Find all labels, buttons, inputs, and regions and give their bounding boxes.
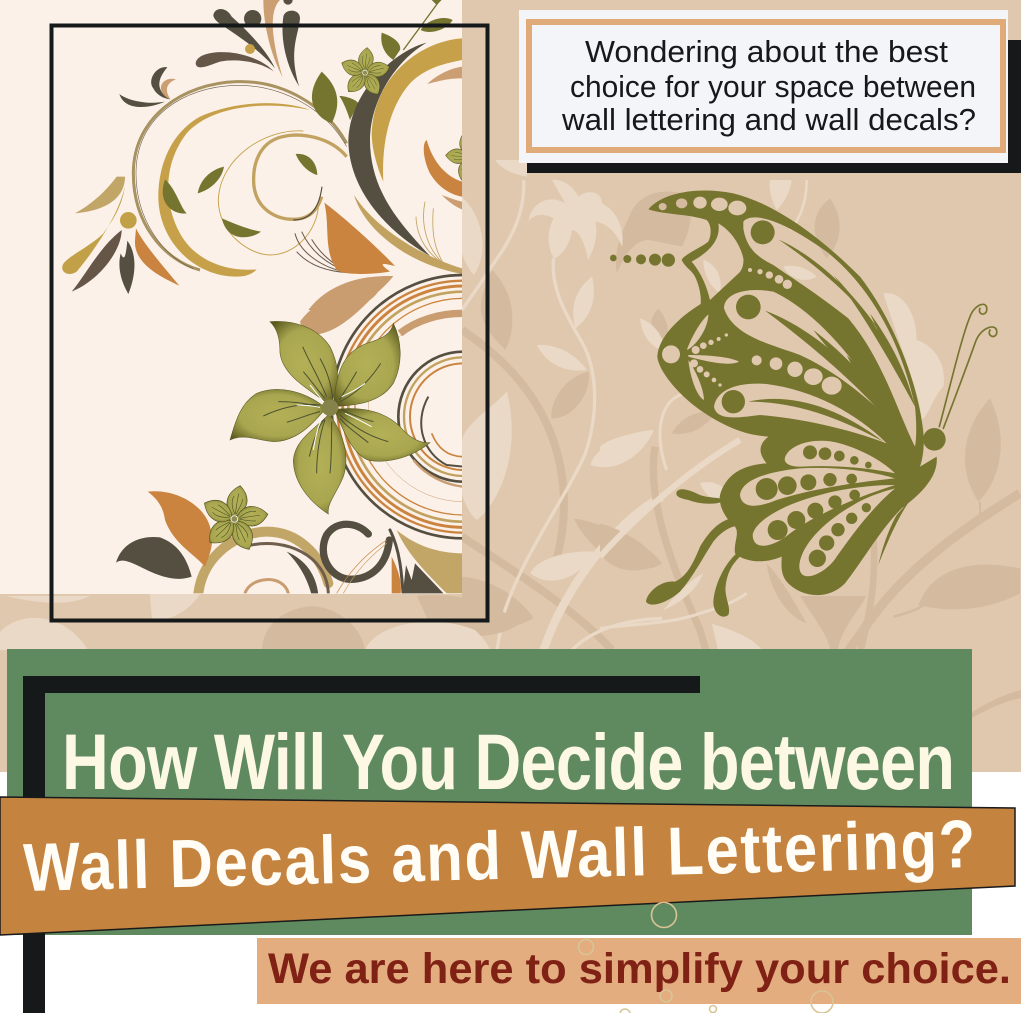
icon: small flower top: [342, 47, 390, 94]
callout: question box: Wondering about the best: [585, 34, 948, 69]
background: lower strip flowers and stems: [0, 594, 1021, 718]
floral art: lower rings and flowers: [116, 274, 462, 594]
floral art: upper swirls: [62, 0, 462, 310]
butterfly head dots trail: [610, 253, 675, 267]
butterfly hindwing dots: [756, 445, 872, 567]
icon: small flower right edge: [445, 135, 462, 180]
background: botanical vines right of butterfly: [600, 180, 1020, 653]
callout: question box: [519, 10, 1021, 173]
callout: question box: choice for your space between: [570, 69, 976, 104]
butterfly legs: [646, 489, 740, 617]
panel: cream floral art: [0, 0, 462, 594]
callout: question box: wall lettering and wall decals?: [561, 102, 976, 137]
icon: small flower bottom: [204, 485, 268, 550]
decorative bubbles: [578, 902, 833, 1013]
heading: main title line: How Will You Decide between: [62, 719, 955, 806]
icon: large olive flower: [230, 321, 430, 514]
panel: green title block: [7, 649, 972, 935]
background: botanical vines left of butterfly: [462, 160, 691, 650]
frame: black rectangle outline: [52, 26, 488, 620]
butterfly forewing veins: [722, 220, 917, 470]
banner: orange ribbon with subtitle: [0, 797, 1015, 935]
decorative black L bar: [23, 676, 700, 1013]
butterfly wings body: [648, 190, 937, 595]
icon: olive butterfly: [610, 190, 997, 617]
banner: orange ribbon with subtitle: Wall Decals and Wall Lettering?: [22, 805, 976, 906]
panel: tagline strip: [257, 938, 1021, 1004]
background: tan patterned wall: [0, 0, 1021, 772]
panel: tagline strip: We are here to simplify your choice.: [268, 945, 1011, 993]
butterfly head and antennae: [878, 304, 997, 565]
